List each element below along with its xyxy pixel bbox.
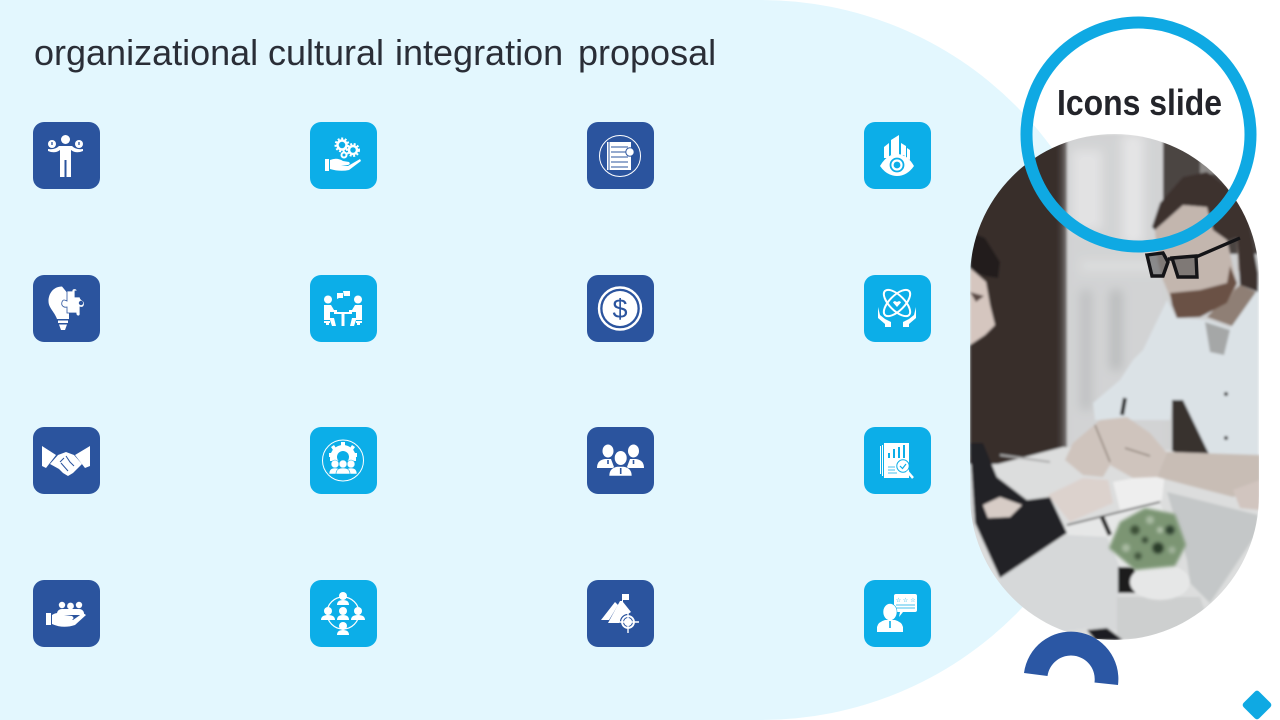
icon tile: people network [310,580,377,647]
title: cultural [268,32,384,73]
icon tile: hand holding gears [310,122,377,189]
man's neck [1207,285,1256,326]
icon tile: reviewer with star rating bubble: ☆ [903,597,908,604]
white paper [1105,538,1109,544]
icon tile: mountain goal target [587,580,654,647]
icon tile: reviewer with star rating bubble: ☆ [896,597,901,604]
man's face [1154,203,1236,297]
pot [1130,564,1190,600]
woman's arm [970,443,1067,578]
icon tile: team and gear cycle [310,427,377,494]
icon tile: reviewer with star rating bubble [864,580,931,647]
icon tile: atom held by hands [864,275,931,342]
title: integration [395,32,563,73]
title: proposal [578,32,716,73]
icon tile: dollar coin: $ [612,294,628,324]
icon tile: two people meeting at a table [310,275,377,342]
photo: two colleagues at a table [970,134,1260,640]
icon tile: business team [587,427,654,494]
ring behind heading [1026,22,1250,246]
icon tile: report under magnifier [864,427,931,494]
lower table [1117,598,1204,640]
laptop [1167,492,1258,603]
icon tile: notebook with key [587,122,654,189]
decorative diamond [1241,689,1273,720]
table [970,447,1259,640]
icon tile: light bulb with puzzle piece [33,275,100,342]
man's beard [1170,266,1237,318]
icon tile: dollar coin [587,275,654,342]
woman's head [970,232,1000,278]
man's hair [1152,172,1258,292]
man's forearm and hands [1157,452,1260,497]
icon tile: handshake [33,427,100,494]
decorative arc [1024,632,1118,685]
plant [1109,508,1186,570]
icon tile: reviewer with star rating bubble: ☆ [910,597,916,604]
icon tile: person weighing options [33,122,100,189]
man's shirt [1093,285,1259,456]
glasses [1147,238,1240,277]
heading: icons slide: Icons slide [1057,82,1222,123]
icon tile: hand holding people [33,580,100,647]
title: organizational [34,32,258,73]
icon tile: eye and city [864,122,931,189]
